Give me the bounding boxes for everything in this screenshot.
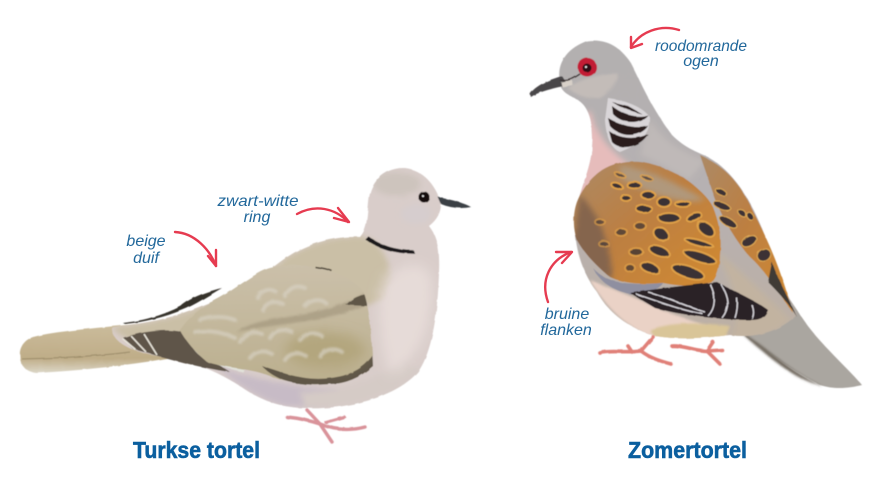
rear flank	[726, 263, 752, 290]
body shading	[112, 172, 433, 408]
black primaries	[630, 282, 768, 320]
eye	[418, 192, 430, 202]
label: zwart-witte ring: zwart-witte	[216, 193, 299, 210]
eye	[578, 58, 596, 76]
neck patch	[605, 98, 650, 152]
main wing	[570, 161, 721, 286]
tail	[735, 270, 862, 388]
wing-tail dark edge	[768, 262, 797, 317]
label: bruine flanken: bruine	[545, 306, 589, 323]
wing feather marks	[595, 171, 718, 283]
primary white stripes	[122, 334, 157, 355]
back highlight	[644, 126, 700, 176]
label: bruine flanken: flanken	[540, 322, 592, 339]
arrow: zwart-witte ring	[297, 208, 349, 222]
label: zwart-witte ring: ring	[244, 209, 270, 226]
lower belly warm	[302, 392, 338, 404]
belly	[590, 280, 701, 336]
title: Zomertortel: Zomertortel	[628, 437, 747, 463]
dark primaries	[122, 330, 230, 372]
black back streak	[123, 288, 222, 324]
wing	[180, 265, 378, 386]
arrow: beige duif	[175, 232, 216, 266]
legs	[600, 337, 722, 364]
blue-grey lower covert	[593, 268, 663, 294]
label: roodomrande ogen: roodomrande	[655, 38, 747, 55]
title: Turkse tortel: Turkse tortel	[133, 437, 260, 463]
head shading	[374, 174, 418, 194]
beak	[530, 76, 568, 97]
bird: Turkse tortel (collared dove)	[20, 168, 471, 442]
body	[559, 40, 797, 338]
body	[112, 168, 441, 408]
breast highlight	[379, 265, 433, 375]
face	[568, 74, 618, 98]
lore line	[560, 74, 580, 81]
arrow: roodomrande ogen	[631, 28, 679, 48]
breast pink	[580, 110, 628, 194]
label: roodomrande ogen: ogen	[683, 53, 719, 70]
foot	[287, 410, 365, 442]
rear wing	[700, 155, 793, 313]
wing feather scallops	[195, 287, 342, 360]
label: beige duif: beige	[126, 233, 166, 250]
beak	[438, 197, 471, 208]
back plumage	[112, 236, 391, 347]
bird: Zomertortel (turtle dove)	[530, 40, 862, 388]
cheek	[401, 204, 431, 224]
belly shade	[224, 370, 320, 408]
neck ring	[366, 237, 414, 253]
tail	[20, 324, 170, 373]
label: beige duif: duif	[133, 250, 160, 267]
pale tertial	[188, 342, 245, 372]
arrow: bruine flanken	[545, 252, 572, 302]
